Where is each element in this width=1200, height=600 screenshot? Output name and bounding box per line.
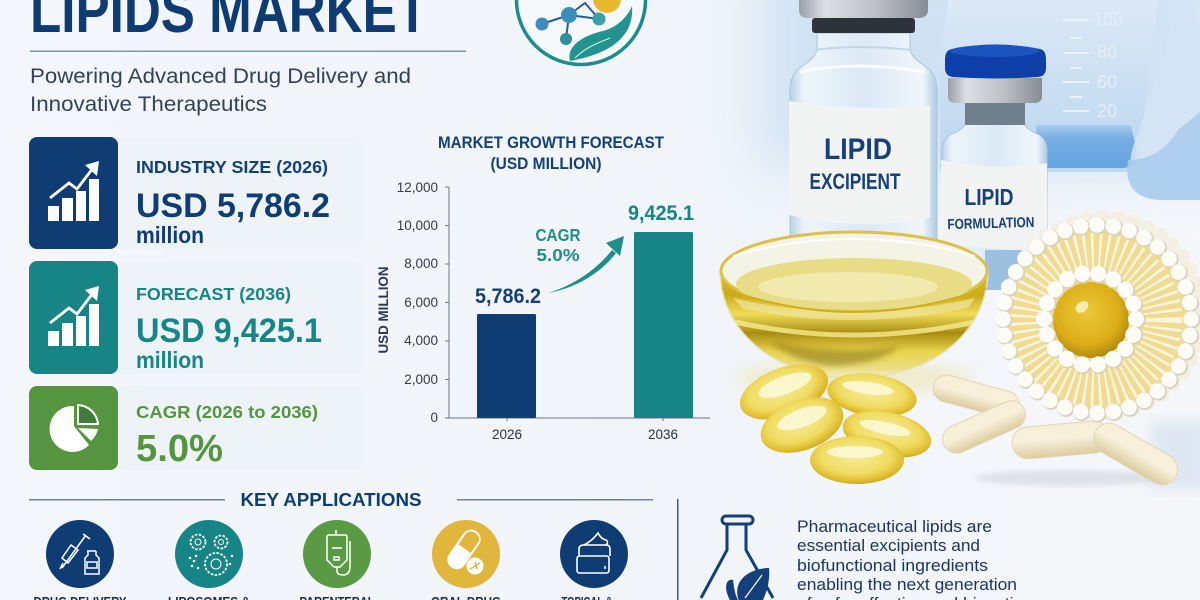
label: INDUSTRY SIZE (2026) bbox=[136, 157, 328, 177]
photo: white capsules bbox=[930, 372, 1183, 490]
divider bbox=[677, 499, 678, 600]
subtitle bbox=[30, 64, 411, 116]
y axis labels: 12,000 bbox=[397, 180, 438, 195]
x axis labels: 2026 bbox=[492, 427, 522, 442]
bar 2026 bbox=[477, 314, 536, 418]
chart: market growth forecast bbox=[376, 134, 710, 442]
y axis labels: 6,000 bbox=[404, 295, 438, 310]
y axis labels: 2,000 bbox=[404, 372, 438, 387]
photo: liposome model bbox=[1003, 218, 1200, 414]
photo: small vial bbox=[941, 44, 1047, 290]
title rule bbox=[30, 50, 466, 52]
description text: biofunctional ingredients bbox=[797, 556, 988, 575]
value: USD 9,425.1 bbox=[136, 312, 322, 350]
photo: softgel capsules bbox=[733, 354, 936, 484]
subtitle: Innovative Therapeutics bbox=[30, 92, 267, 116]
description text: enabling the next generation bbox=[797, 575, 1017, 594]
photo: background flasks: 60 bbox=[1097, 72, 1117, 92]
photo: bowl of oil bbox=[720, 232, 988, 394]
label: FORECAST (2036) bbox=[136, 284, 291, 304]
value: USD 5,786.2 bbox=[136, 187, 330, 225]
y axis labels: 8,000 bbox=[404, 256, 438, 271]
icon: flask with leaf bbox=[701, 516, 773, 600]
photo: background flasks bbox=[940, 0, 1200, 200]
label text: LIPID bbox=[824, 133, 892, 166]
photo: background flasks: 80 bbox=[1097, 42, 1117, 62]
vial label bbox=[789, 101, 930, 224]
panel: industry size bbox=[29, 137, 362, 249]
icon: cream jar bbox=[577, 533, 610, 573]
application: drug delivery bbox=[34, 520, 127, 600]
application: liposomes bbox=[168, 520, 250, 600]
y axis labels: 4,000 bbox=[404, 333, 438, 348]
icon: syringe and vial bbox=[60, 534, 99, 574]
icon: growth chart bbox=[48, 161, 99, 221]
axes bbox=[445, 187, 710, 421]
chart title bbox=[438, 134, 664, 173]
photo: background flasks: 20 bbox=[1097, 101, 1117, 121]
CAGR note bbox=[536, 225, 581, 265]
application: parenteral bbox=[300, 520, 375, 600]
icon: IV bag bbox=[327, 530, 350, 575]
photo: large vial bbox=[789, 0, 937, 240]
CAGR note: 5.0% bbox=[536, 245, 580, 265]
icon: pie chart bbox=[50, 405, 98, 452]
arrow: growth bbox=[548, 236, 624, 293]
description text: Pharmaceutical lipids are bbox=[797, 517, 992, 536]
x axis labels bbox=[492, 427, 678, 442]
value 2026: 5,786.2 bbox=[475, 284, 541, 308]
icon: capsule and tablet bbox=[444, 526, 484, 574]
label text: FORMULATION bbox=[947, 215, 1035, 233]
CAGR note: CAGR bbox=[536, 225, 581, 245]
label text: EXCIPIENT bbox=[810, 169, 901, 194]
unit: million bbox=[136, 222, 204, 248]
unit: million bbox=[136, 347, 204, 373]
panel: forecast bbox=[29, 261, 362, 374]
application: topical bbox=[560, 520, 628, 600]
value 2036: 9,425.1 bbox=[628, 201, 694, 225]
key applications heading: KEY APPLICATIONS bbox=[240, 489, 422, 510]
chart title: (USD MILLION) bbox=[490, 155, 602, 173]
subtitle: Powering Advanced Drug Delivery and bbox=[30, 64, 411, 88]
chart title: MARKET GROWTH FORECAST bbox=[438, 134, 664, 152]
x axis labels: 2036 bbox=[648, 427, 678, 442]
bar 2036 bbox=[634, 232, 693, 418]
label: CAGR (2026 to 2036) bbox=[136, 402, 318, 422]
label text: LIPID bbox=[964, 184, 1014, 210]
icon: liposomes bbox=[190, 534, 232, 575]
vial label bbox=[941, 160, 1047, 249]
y axis labels: 10,000 bbox=[397, 218, 438, 233]
application: oral drug bbox=[431, 520, 501, 600]
logo: molecule and leaf bbox=[516, 0, 646, 64]
y axis title: USD MILLION bbox=[376, 266, 391, 354]
y axis labels: 0 bbox=[430, 410, 438, 425]
description text: essential excipients and bbox=[797, 536, 980, 555]
icon: growth chart bbox=[48, 286, 99, 346]
value: 5.0% bbox=[136, 428, 223, 470]
panel: CAGR bbox=[29, 386, 362, 470]
y axis labels bbox=[397, 180, 438, 425]
photo: background flasks: 100 bbox=[1093, 9, 1123, 29]
description text bbox=[797, 517, 1032, 600]
